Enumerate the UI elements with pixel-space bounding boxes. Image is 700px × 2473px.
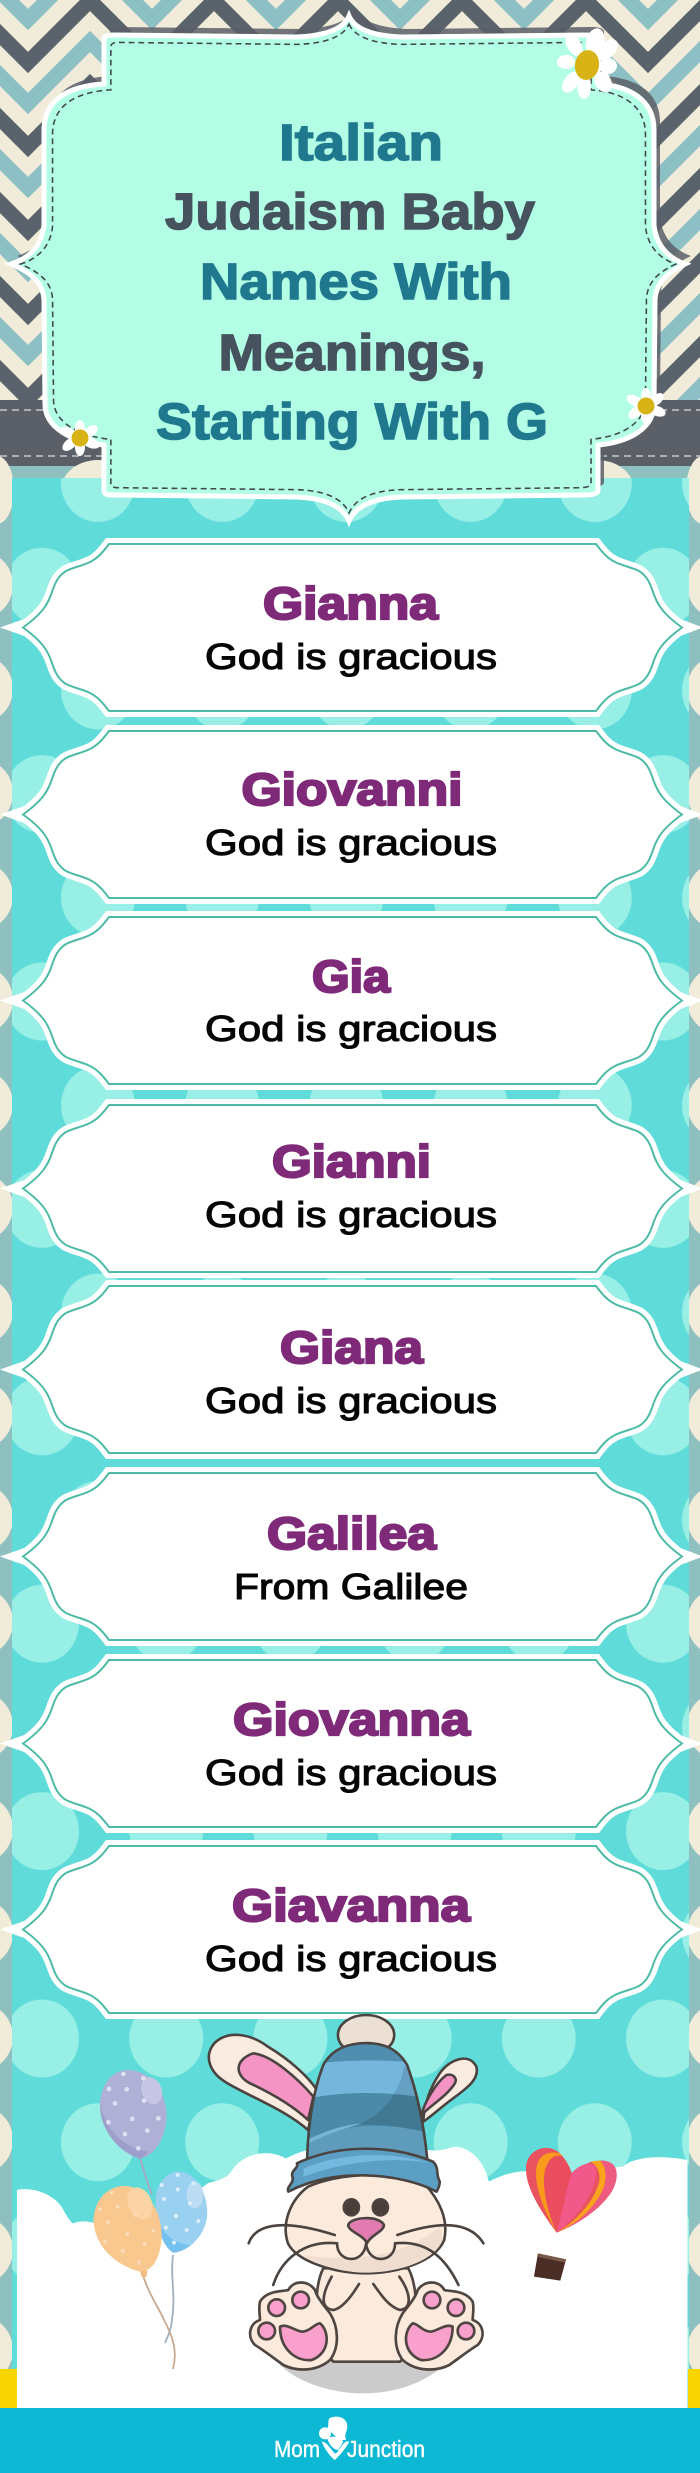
card: Galilea xyxy=(0,1473,700,1640)
card: Gia xyxy=(0,917,700,1084)
pompom xyxy=(338,2015,394,2055)
icon: purple balloon xyxy=(100,2070,167,2158)
card: Giovanna: God is gracious xyxy=(205,1752,497,1793)
icon: large daisy xyxy=(557,26,622,99)
icon: small daisy left xyxy=(59,420,101,456)
card: Giovanni: God is gracious xyxy=(205,822,497,863)
card: Giavanna: God is gracious xyxy=(205,1938,497,1979)
card: Galilea: Galilea xyxy=(267,1508,437,1559)
icon: blue balloon xyxy=(156,2171,207,2253)
bunny head and hat xyxy=(209,2015,483,2285)
card: Gianna xyxy=(0,544,700,711)
icon: heart hot air balloon xyxy=(526,2148,617,2281)
title text: Starting With G xyxy=(156,393,548,450)
right ear xyxy=(423,2059,477,2122)
title text: Meanings, xyxy=(218,324,486,381)
title panel xyxy=(11,8,691,521)
icon: balloon strings xyxy=(140,2158,175,2369)
card: Giana xyxy=(0,1286,700,1453)
card: Gianna: God is gracious xyxy=(205,636,497,677)
card: Giana: God is gracious xyxy=(205,1380,497,1421)
card: Gianna: Gianna xyxy=(263,578,439,629)
icon: bunny xyxy=(209,2015,483,2393)
icon: orange balloon xyxy=(93,2183,162,2277)
title text: Italian xyxy=(279,114,443,171)
yellow corner blocks xyxy=(0,2369,700,2408)
logo text: Mom xyxy=(274,2436,320,2462)
polka dot teal background xyxy=(0,456,700,2408)
card: Giavanna xyxy=(0,1846,700,2013)
bunny lower body xyxy=(250,2268,483,2393)
head xyxy=(286,2175,445,2273)
body xyxy=(317,2268,416,2362)
card: Gianni: God is gracious xyxy=(205,1194,497,1235)
card: Giana: Giana xyxy=(280,1322,424,1373)
card: Giovanni xyxy=(0,731,700,898)
card: Giovanni: Giovanni xyxy=(242,764,462,815)
ground shadow xyxy=(272,2353,450,2393)
MomJunction logo: Junction xyxy=(347,2436,425,2462)
right foot xyxy=(396,2282,483,2370)
hat brim xyxy=(288,2149,440,2192)
balloon basket xyxy=(534,2253,566,2281)
card: Gia: God is gracious xyxy=(205,1008,497,1049)
card: Giovanna: Giovanna xyxy=(233,1694,471,1745)
card: Gianni: Gianni xyxy=(272,1136,431,1187)
nose and mouth xyxy=(348,2218,384,2243)
title text: Judaism Baby xyxy=(165,183,536,240)
dark ribbon band xyxy=(0,400,700,466)
panel shadow xyxy=(17,8,691,513)
card: Gianni xyxy=(0,1105,700,1272)
logo icon xyxy=(319,2417,349,2460)
whiskers xyxy=(249,2225,483,2285)
arms xyxy=(324,2277,409,2310)
dashed border xyxy=(20,24,676,513)
eyes xyxy=(344,2199,359,2215)
card: Gia: Gia xyxy=(312,951,391,1002)
head shading xyxy=(304,2227,442,2273)
MomJunction logo xyxy=(274,2417,425,2462)
title text: Names With xyxy=(200,253,512,310)
left ear xyxy=(209,2035,317,2130)
panel body xyxy=(11,16,685,521)
card: Giavanna: Giavanna xyxy=(232,1880,471,1931)
title text xyxy=(156,114,548,450)
left foot xyxy=(250,2282,337,2370)
footer band xyxy=(0,2408,700,2473)
chevron header background xyxy=(0,0,700,405)
card: Galilea: From Galilee xyxy=(234,1566,468,1607)
white clouds xyxy=(17,2147,688,2408)
card: Giovanna xyxy=(0,1660,700,1827)
icon: small daisy right xyxy=(625,388,667,424)
hat xyxy=(304,2040,433,2162)
